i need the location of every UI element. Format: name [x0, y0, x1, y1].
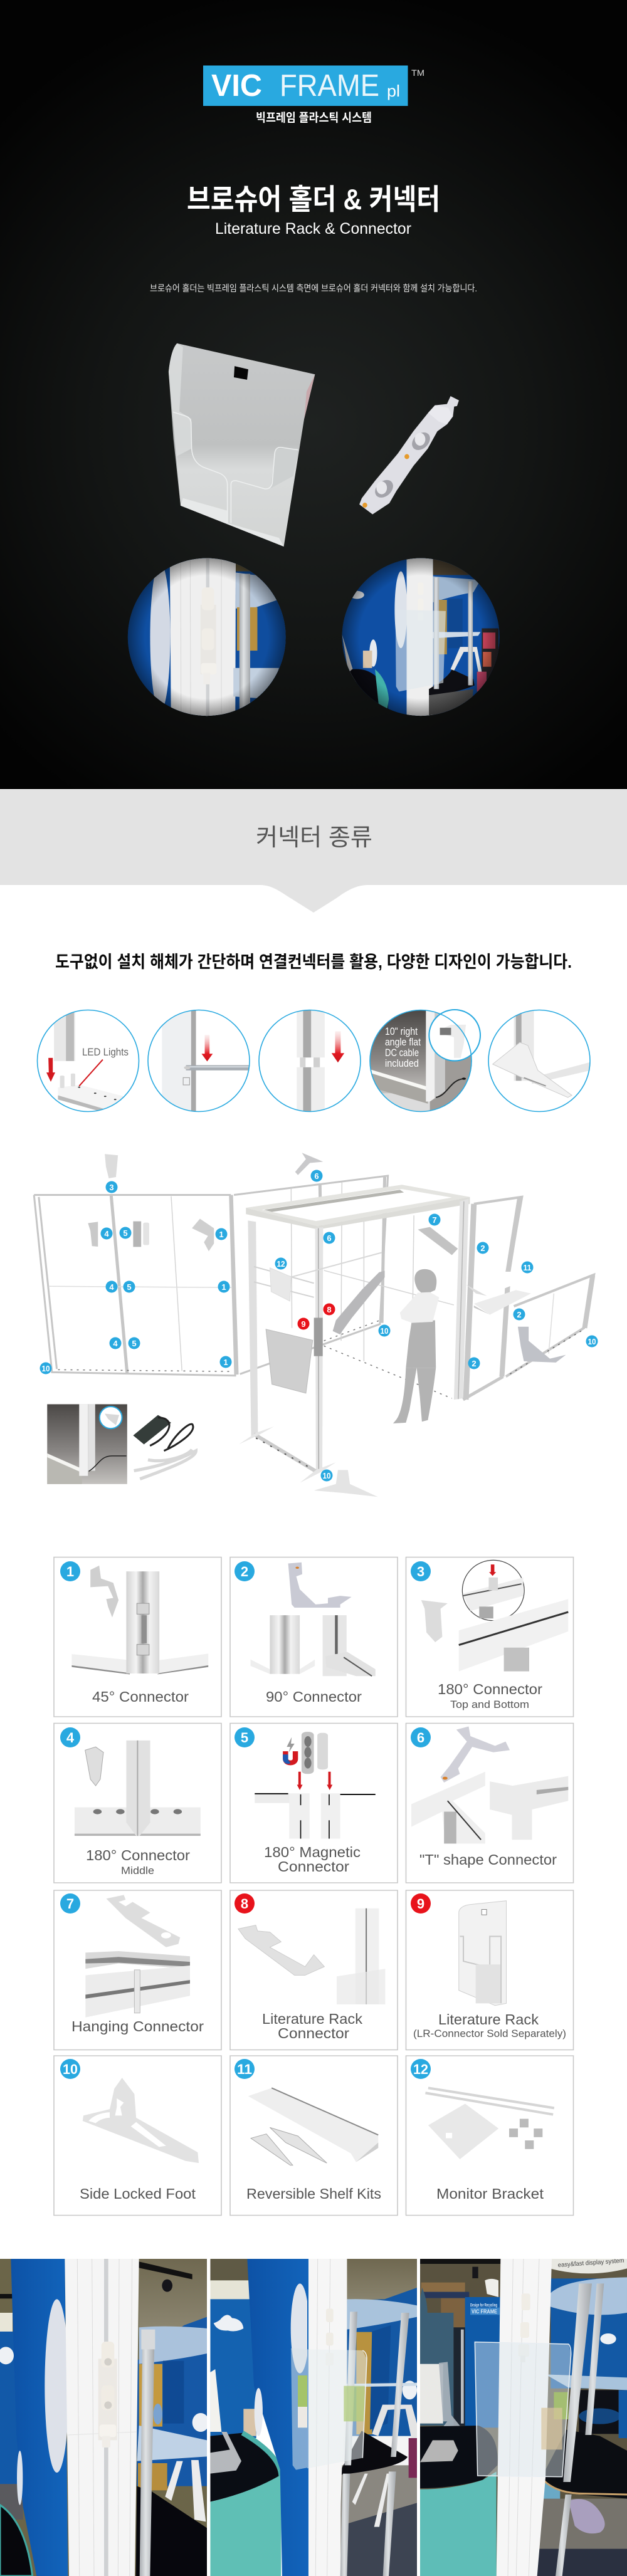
numbered markers: 2	[517, 1310, 522, 1319]
numbered markers: 4	[104, 1229, 109, 1238]
text: DC cable note: DC cable	[385, 1047, 419, 1059]
card labels: 45° Connector	[92, 1689, 189, 1705]
card badges: 4	[66, 1730, 75, 1746]
card badges: 2	[241, 1564, 248, 1579]
card 5 art: magnetic connector	[255, 1732, 376, 1839]
text on photo: overhead banner: easy&fast display system	[557, 2258, 624, 2269]
circle outlines	[38, 1010, 590, 1112]
numbered markers: 5	[123, 1228, 128, 1238]
numbered markers: 4	[113, 1339, 118, 1348]
card labels: Top and Bottom	[450, 1699, 529, 1710]
card labels: "T" shape Connector	[419, 1851, 557, 1868]
card outlines	[54, 1557, 573, 2215]
text on photo: recycling banner: VIC FRAME	[472, 2308, 497, 2315]
white DC cable	[134, 1450, 196, 1479]
card labels: 180° Connector	[438, 1681, 542, 1697]
photo 1: connector on frame	[0, 2259, 209, 2576]
numbered markers: 6	[327, 1233, 332, 1243]
text: LED Lights: LED Lights	[82, 1046, 129, 1058]
right wall frames	[463, 1197, 594, 1400]
text: DC cable note: included	[385, 1057, 419, 1069]
numbered markers	[40, 1170, 598, 1482]
card 11 art: reversible shelf kits	[248, 2088, 378, 2165]
numbered markers: 11	[523, 1263, 532, 1272]
numbered markers: 10	[322, 1471, 331, 1480]
numbered markers: 1	[219, 1230, 224, 1239]
text on photo: recycling banner	[470, 2303, 497, 2315]
panel: hero dark background	[0, 0, 627, 789]
text: DC cable note: angle flat	[385, 1036, 421, 1048]
left wall frames	[34, 1195, 237, 1376]
numbered markers: 10	[41, 1364, 50, 1373]
card labels: Literature Rack	[262, 2011, 363, 2027]
text: DC cable note: 10" right	[385, 1025, 418, 1037]
subtitle: Literature Rack & Connector	[215, 220, 411, 238]
detail circles row	[37, 1010, 591, 1112]
circle: locked foot	[492, 1010, 591, 1098]
card badges: 6	[417, 1730, 424, 1746]
text: DC cable note	[385, 1025, 421, 1069]
exploded booth diagram	[34, 1153, 598, 1497]
card labels: Reversible Shelf Kits	[246, 2186, 381, 2202]
card badges: 8	[241, 1896, 248, 1912]
card badges: 9	[417, 1896, 424, 1912]
photo: connector close-up	[125, 555, 288, 719]
connector cards grid	[54, 1557, 573, 2215]
card labels: 180° Magnetic	[264, 1844, 361, 1860]
circle: LED lights	[46, 1012, 124, 1111]
heading band: connector types: 커넥터 종류	[256, 825, 372, 851]
numbered markers: 2	[480, 1243, 485, 1253]
power adapter	[133, 1415, 193, 1451]
woman silhouette	[393, 1269, 439, 1423]
hero product images	[125, 343, 502, 719]
numbered markers: 3	[109, 1183, 114, 1192]
text on photo: recycling banner: Design for Recycling	[470, 2303, 497, 2308]
card badges: 5	[241, 1730, 248, 1746]
bottom photos	[0, 2258, 627, 2576]
numbered markers: 1	[223, 1358, 228, 1367]
loose connector icons	[88, 1153, 566, 1497]
card labels: Connector	[278, 2025, 349, 2041]
card labels	[71, 1681, 566, 2202]
card badges: 3	[417, 1564, 424, 1579]
monitor bracket plate	[270, 1268, 291, 1301]
photo 3: rack mounted, front view	[420, 2259, 627, 2576]
circle: DC cable	[370, 1010, 472, 1112]
photo 2: rack mounted, right part	[307, 2259, 417, 2576]
card 8 art: literature rack connector	[238, 1908, 385, 2004]
card badges: 11	[237, 2061, 252, 2077]
numbered markers: 5	[132, 1339, 137, 1348]
numbered markers: 7	[432, 1215, 437, 1225]
card labels: Connector	[278, 1858, 349, 1875]
mounting connector strip	[314, 1317, 323, 1356]
numbered markers: 10	[588, 1337, 596, 1346]
numbered markers: 8	[327, 1305, 332, 1314]
description text: 브로슈어 홀더는 빅프레임 플라스틱 시스템 측면에 브로슈어 홀더 커넥터와 함께 설치 가능합니다.	[150, 283, 477, 294]
card badges	[60, 1561, 431, 2079]
literature rack enlarged	[266, 1329, 313, 1393]
circle: rod insert	[162, 1010, 250, 1111]
back wall frames	[234, 1176, 454, 1398]
logo: VIC FRAME pl: pl	[387, 81, 400, 100]
card labels: Side Locked Foot	[80, 2186, 196, 2202]
numbered markers: 9	[301, 1319, 306, 1329]
card badges: 10	[63, 2061, 78, 2077]
numbered markers: 2	[472, 1359, 477, 1368]
photo: rack mounted on frame	[341, 555, 502, 719]
card 4 art: 180 degree connector middle	[75, 1741, 201, 1836]
numbered markers: 5	[127, 1282, 132, 1292]
card badges: 12	[413, 2061, 428, 2077]
numbered markers: 1	[221, 1282, 226, 1292]
card labels: Literature Rack	[438, 2011, 539, 2028]
card labels: Monitor Bracket	[436, 2186, 544, 2202]
card 7 art: hanging connector	[85, 1895, 190, 2018]
card badges: 7	[66, 1896, 74, 1912]
photo 2: rack mounted, left part	[210, 2259, 307, 2576]
card labels: 180° Connector	[86, 1847, 190, 1863]
logo: VIC FRAME pl: VIC	[211, 69, 262, 103]
card 1 art: 45 degree connector	[71, 1566, 208, 1674]
card labels: (LR-Connector Sold Separately)	[413, 2028, 566, 2039]
card 6 art: T shape connector	[411, 1726, 568, 1843]
numbered markers: 4	[109, 1282, 114, 1292]
card labels: Middle	[121, 1865, 154, 1877]
numbered markers: 6	[314, 1171, 319, 1181]
card badges: 1	[66, 1564, 74, 1579]
circle: magnetic join	[297, 1010, 345, 1111]
numbered markers: 10	[380, 1326, 389, 1336]
reversible shelf	[466, 1272, 531, 1315]
card labels: 90° Connector	[266, 1689, 362, 1705]
headline text: 도구없이 설치 해체가 간단하며 연결컨넥터를 활용, 다양한 디자인이 가능합니다.	[55, 953, 572, 971]
card 2 art: 90 degree connector	[251, 1563, 376, 1676]
logo: VIC FRAME pl	[203, 65, 424, 106]
logo: VIC FRAME pl: TM	[411, 68, 424, 78]
literature rack connector enlarged	[333, 1270, 385, 1334]
card 9 art: literature rack	[459, 1901, 507, 2006]
card 10 art: side locked foot	[83, 2078, 199, 2163]
icon: literature rack connector	[359, 396, 459, 515]
card 12 art: monitor bracket	[425, 2088, 554, 2159]
card labels: Hanging Connector	[71, 2018, 204, 2034]
numbered markers: 12	[277, 1259, 285, 1269]
central gantry frame	[239, 1185, 470, 1483]
heading band: connector types	[0, 790, 627, 913]
LED frame photo	[47, 1404, 127, 1484]
icon: clear literature rack	[169, 343, 315, 547]
card 3 art: 180 degree connector top and bottom	[421, 1560, 568, 1672]
logo subtitle: 빅프레임 플라스틱 시스템	[256, 111, 372, 125]
circle: DC plug inset	[429, 1010, 480, 1061]
title: 브로슈어 홀더 & 커넥터	[187, 183, 440, 216]
logo: VIC FRAME pl: FRAME	[280, 69, 379, 103]
